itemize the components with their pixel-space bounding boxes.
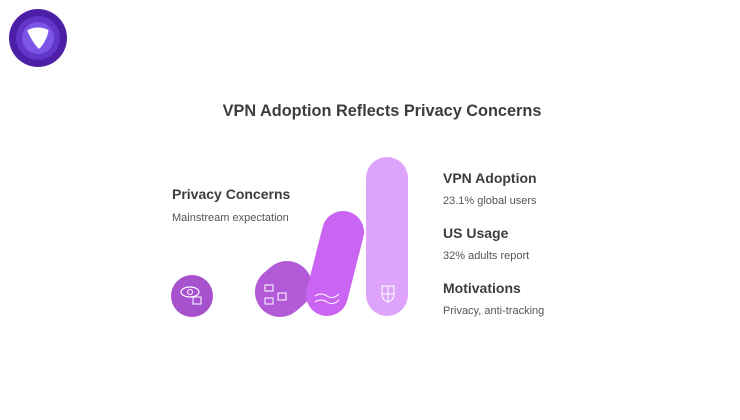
title: VPN Adoption Reflects Privacy Concerns xyxy=(223,102,541,120)
text: right column xyxy=(443,170,544,317)
text: right column: Motivations xyxy=(443,280,521,296)
logo xyxy=(9,9,67,67)
text: right column: Privacy, anti-tracking xyxy=(443,305,544,317)
text: privacy concerns: Mainstream expectation xyxy=(172,212,289,224)
text: right column: US Usage xyxy=(443,225,508,241)
bar 3 xyxy=(382,178,394,302)
text: privacy concerns: Privacy Concerns xyxy=(172,186,290,202)
bar 2 xyxy=(315,232,343,304)
icon: eye lock circle xyxy=(171,275,213,317)
bar 1 xyxy=(265,285,287,304)
text: privacy concerns xyxy=(172,186,290,224)
text: right column: VPN Adoption xyxy=(443,170,537,186)
text: right column: 32% adults report xyxy=(443,250,529,262)
text: right column: 23.1% global users xyxy=(443,195,537,207)
